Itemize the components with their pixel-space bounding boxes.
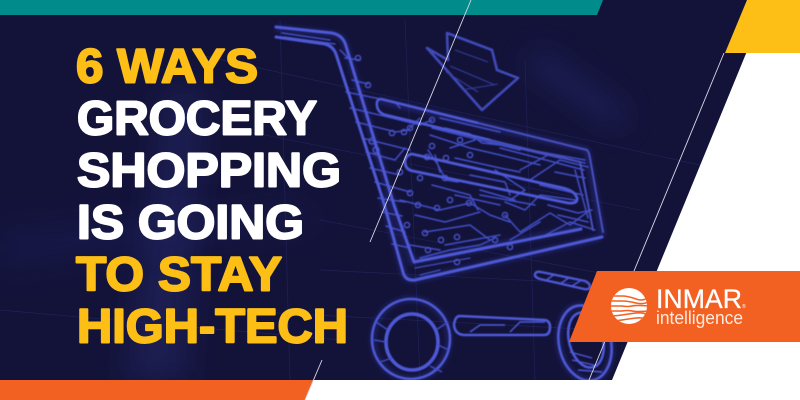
logo registered mark: ® [742,303,746,310]
orange logo panel [569,271,800,342]
title line: GROCERY: GROCERY [77,92,317,146]
icon: circuit nodes [355,55,513,265]
icon: left wheel [372,299,450,379]
teal top bar [0,0,603,15]
icon: cart frame and handle [276,27,603,280]
shopping cart illustration [275,27,618,386]
title [76,40,348,354]
icon: down arrow [427,33,518,110]
title line: SHOPPING: SHOPPING [77,144,341,198]
yellow corner block [725,0,800,53]
icon: cart glow [275,28,618,386]
icon: circuit traces in basket [282,33,595,275]
logo wordmark: INMAR: INMAR [656,284,742,314]
icon: small parts tray [535,272,590,289]
title line: 6 WAYS: 6 WAYS [76,40,258,94]
title line: HIGH-TECH: HIGH-TECH [77,300,348,354]
icon: cart axle [454,316,550,335]
title line: IS GOING: IS GOING [77,196,304,250]
icon: right wheel [556,304,614,380]
thin diagonal lines [305,0,724,400]
logo wordmark: intelligence: intelligence [656,308,743,328]
orange bottom bar [0,380,313,400]
icon: Inmar globe logo [611,288,647,324]
title line: TO STAY: TO STAY [76,248,282,302]
